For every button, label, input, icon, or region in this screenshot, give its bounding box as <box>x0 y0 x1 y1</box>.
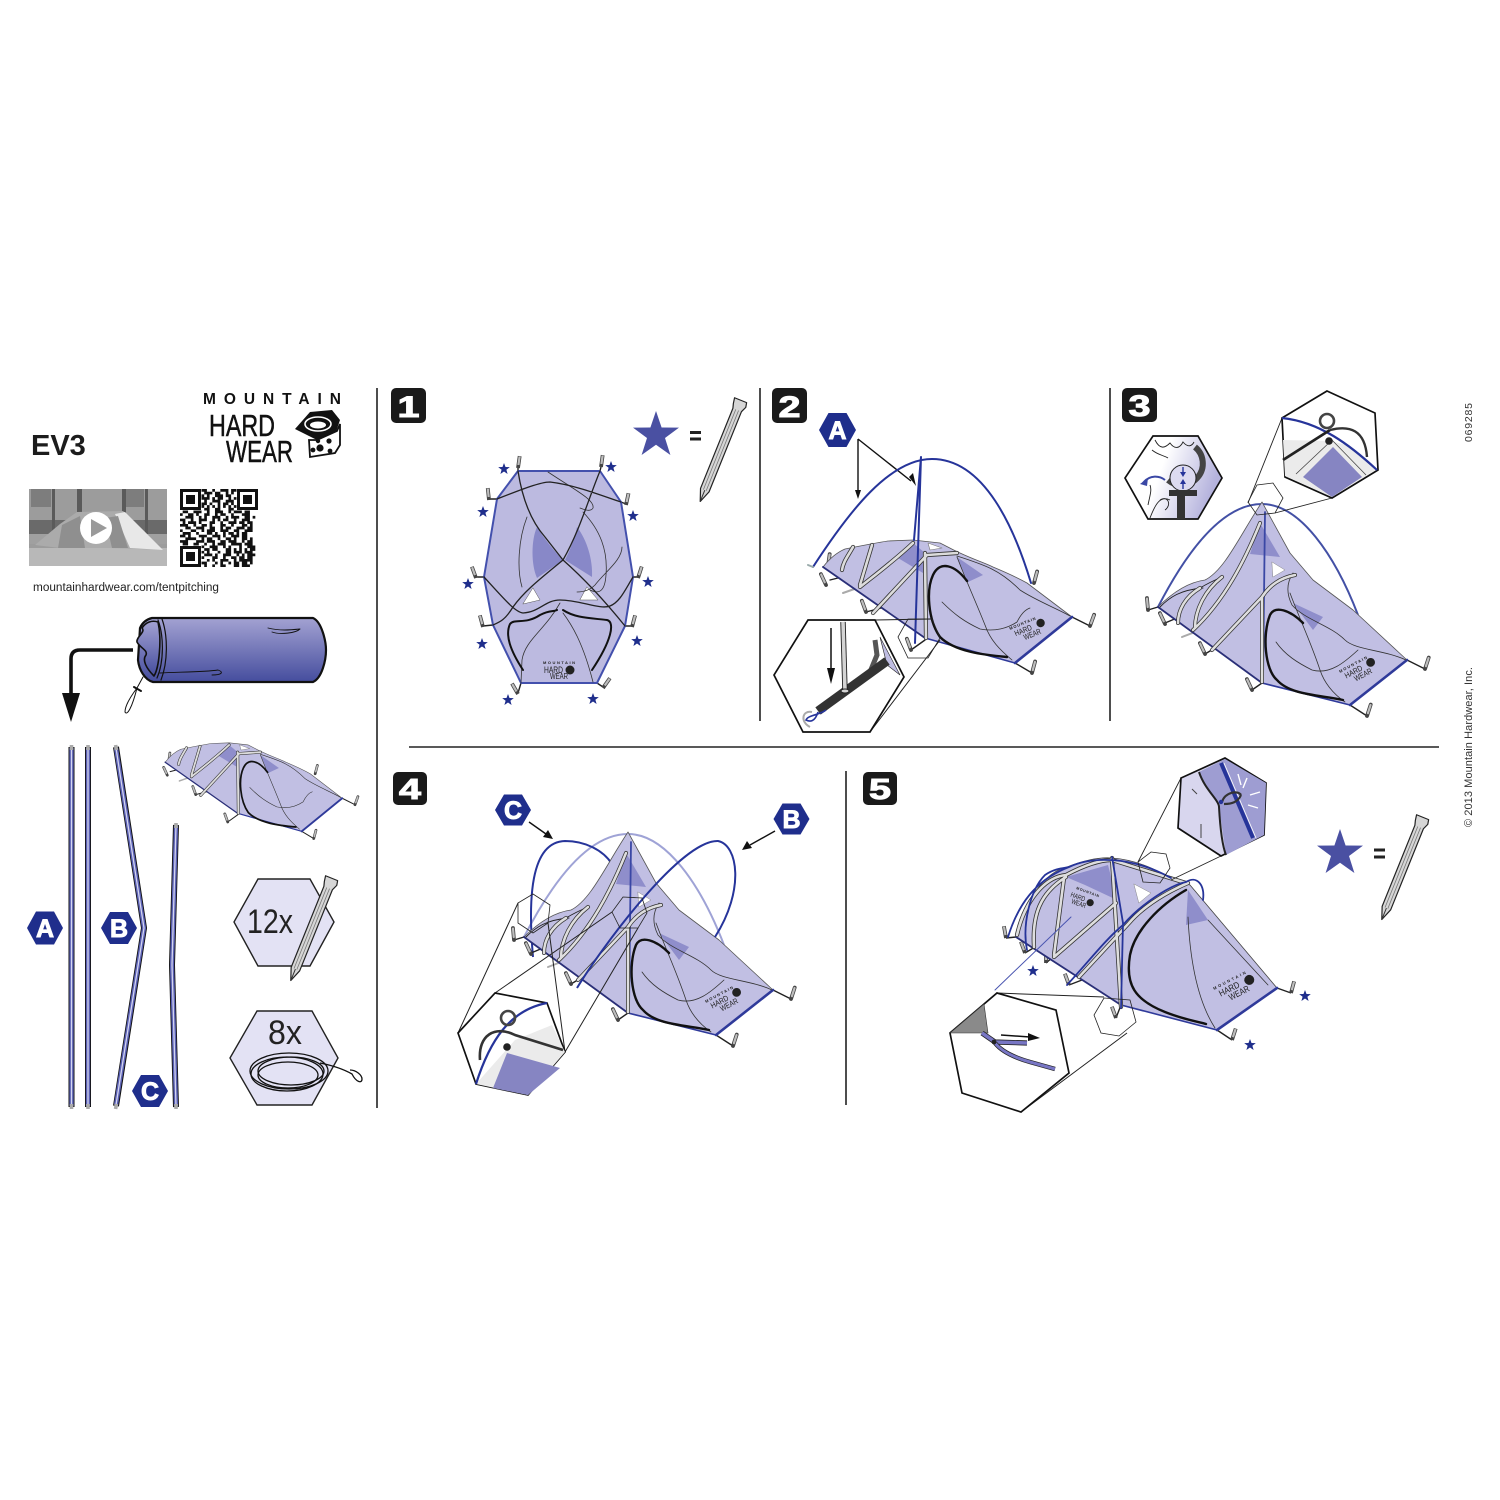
tent logo <box>543 660 575 681</box>
tent raised on pole <box>1147 502 1429 716</box>
tent logo <box>1009 613 1049 646</box>
tent logo: HARD <box>709 993 730 1010</box>
step number 4 <box>393 772 427 806</box>
pole label C: C <box>141 1078 159 1106</box>
stakes quantity 12x <box>234 876 339 983</box>
panel: step 4 <box>393 772 810 1095</box>
legend: star equals stake <box>633 398 748 504</box>
detail callout: clip at apex <box>1248 391 1378 515</box>
tent logo: HARD <box>1343 663 1364 680</box>
tent with poles <box>513 832 795 1046</box>
pole label B: B <box>782 806 801 834</box>
brand logo: Mountain Hardwear: MOUNTAIN <box>203 391 341 408</box>
pole C behind tent <box>531 841 612 957</box>
tent logo: WEAR <box>550 672 568 681</box>
star markers <box>462 461 654 705</box>
panel: step 5 <box>863 758 1430 1112</box>
tent logo: MOUNTAIN <box>704 985 734 1004</box>
star markers <box>1027 965 1311 1050</box>
legend: star equals stake <box>1317 815 1430 922</box>
tent logo front <box>1212 968 1259 1007</box>
detail callout: hand opening clip <box>1125 436 1222 519</box>
pole A arcs <box>808 457 1031 643</box>
pole label C <box>132 1075 168 1107</box>
step number 5 <box>863 772 897 806</box>
tent logo: MOUNTAIN <box>1338 655 1368 674</box>
panel: step 2 <box>772 388 1094 732</box>
tent logo: WEAR <box>719 996 740 1013</box>
tent logo back: HARD <box>1069 892 1086 903</box>
pole label A: A <box>828 417 847 445</box>
tent logo: WEAR <box>1353 666 1374 683</box>
tent logo <box>704 982 746 1018</box>
flat tent footprint <box>484 471 633 683</box>
tent logo back: MOUNTAIN <box>1076 886 1100 898</box>
tent logo: HARD <box>1013 623 1033 638</box>
pole label C <box>495 794 531 826</box>
step number 1: 1 <box>398 391 420 424</box>
brand logo: Mountain Hardwear: HARD <box>209 408 275 443</box>
step number 3: 3 <box>1128 390 1150 423</box>
video thumbnail with play button <box>29 489 167 566</box>
pole label B <box>101 912 137 944</box>
pole label A <box>819 413 856 447</box>
step number 2: 2 <box>778 391 800 424</box>
poles A <box>72 745 88 1109</box>
arrow from bag to contents <box>62 650 133 722</box>
arrows to poles <box>855 439 916 499</box>
detail callout: tensioner strap <box>950 993 1136 1112</box>
guy lines quantity 8x: 8x <box>268 1014 302 1052</box>
tent logo: MOUNTAIN <box>1009 616 1036 631</box>
step number 5: 5 <box>869 774 891 806</box>
step number 3 <box>1122 388 1157 423</box>
document code 069285: 069285 <box>1463 403 1475 442</box>
tent logo: HARD <box>544 665 563 675</box>
panel: step 3 <box>1122 388 1429 716</box>
brand logo: Mountain Hardwear: WEAR <box>226 434 293 469</box>
stakes quantity 12x: 12x <box>247 903 293 941</box>
pole label C: C <box>504 797 522 825</box>
step number 4: 4 <box>399 774 421 806</box>
detail callout: pole clips <box>458 894 647 1095</box>
stakes and guy lines <box>472 455 642 694</box>
step number 2 <box>772 388 807 424</box>
title: EV3: EV3 <box>31 430 86 462</box>
tent logo front: HARD <box>1217 979 1242 998</box>
pole label B <box>774 804 810 834</box>
tent logo back <box>1067 885 1100 913</box>
arrows to poles B and C <box>529 822 775 850</box>
pole label A <box>27 912 63 944</box>
guy lines quantity 8x <box>230 1011 362 1105</box>
tent logo: MOUNTAIN <box>543 660 575 665</box>
pole label A: A <box>36 915 54 943</box>
tent logo <box>1338 652 1380 688</box>
copyright note: © 2013 Mountain Hardwear, Inc. <box>1463 667 1475 827</box>
tent with first pole <box>821 540 1094 673</box>
divider lines <box>377 388 1439 1108</box>
stakes and guy lines <box>1004 926 1294 1040</box>
stuff sack illustration <box>125 618 326 713</box>
fully pitched tent <box>995 857 1277 1030</box>
detail callout: pole into buckle <box>774 619 940 732</box>
light pole arc <box>524 834 724 945</box>
tent logo: WEAR <box>1022 627 1042 642</box>
website address: mountainhardwear.com/tentpitching <box>33 582 219 594</box>
brand logo: Mountain Hardwear <box>203 391 341 469</box>
tent logo back: WEAR <box>1070 898 1087 910</box>
pole B arc <box>577 841 735 988</box>
pole C <box>172 823 176 1109</box>
pole label B: B <box>110 915 128 943</box>
panel: parts overview <box>27 391 362 1109</box>
QR code <box>180 489 258 567</box>
step number 1 <box>391 388 426 424</box>
detail callout: pole clip on ridge <box>1138 758 1266 883</box>
pole B <box>116 745 144 1109</box>
pole arc behind tent <box>1158 504 1358 615</box>
panel: step 1 <box>391 388 748 705</box>
tent logo front: MOUNTAIN <box>1212 970 1247 991</box>
pitched tent thumbnail <box>164 743 358 839</box>
tent logo front: WEAR <box>1227 983 1252 1002</box>
